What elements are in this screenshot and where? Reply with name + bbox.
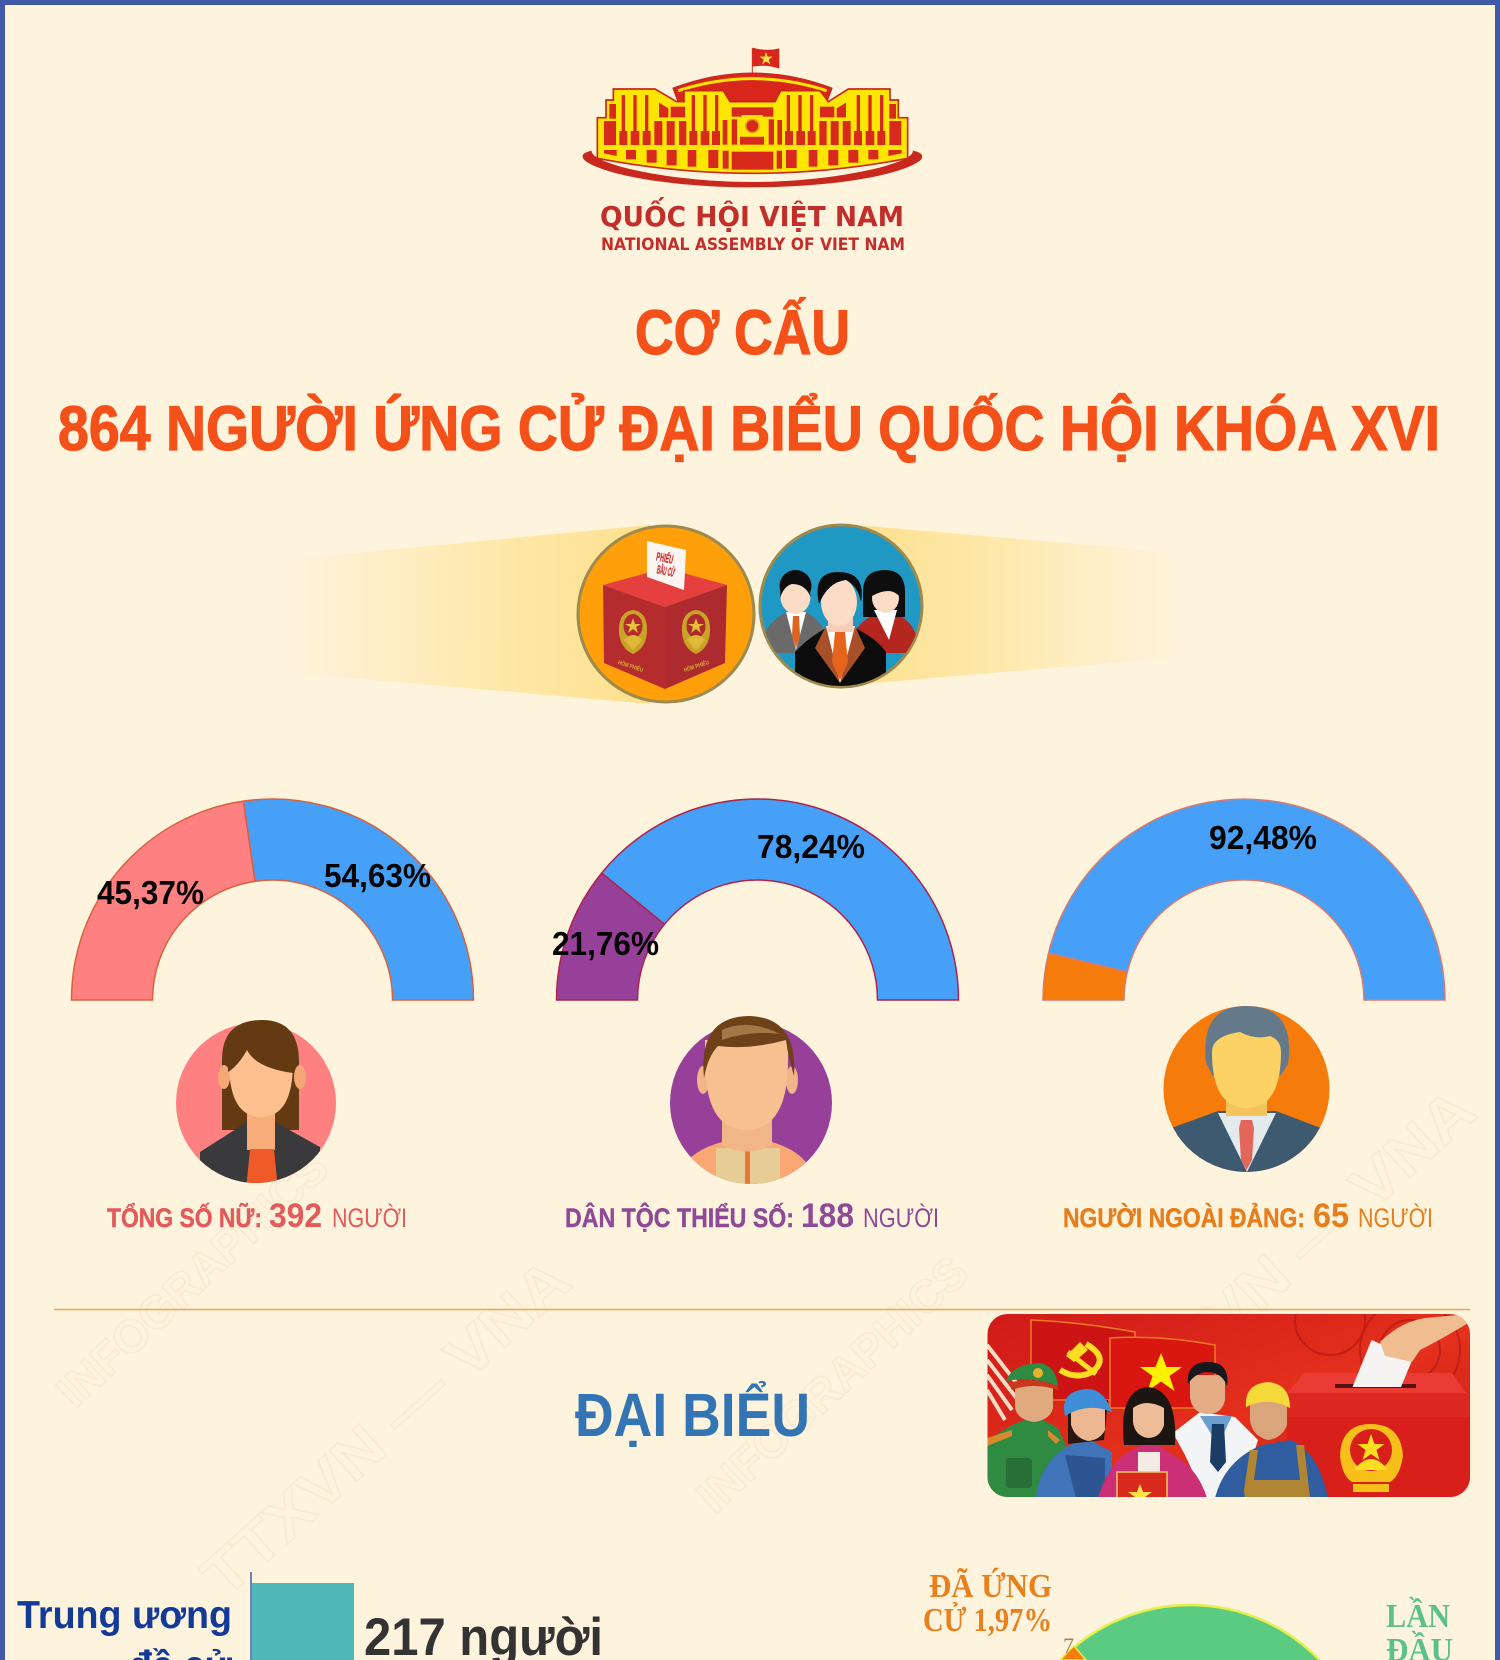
caption: ethnic minorities (565, 1197, 939, 1235)
party flag (1031, 1320, 1135, 1400)
national flag (1110, 1337, 1215, 1408)
icon: ethnic minority man avatar (670, 1016, 832, 1190)
worker woman in blue helmet (1036, 1389, 1112, 1498)
watermarks (46, 1075, 1488, 1610)
caption: non-party (1063, 1197, 1433, 1235)
caption: non-party: NGƯỜI (1358, 1202, 1433, 1233)
ballot paper: BẦU CỬ (656, 561, 676, 580)
icon: ballot box (578, 526, 754, 702)
pie label: previously ran (923, 1567, 1052, 1639)
caption: ethnic minorities: NGƯỜI (863, 1202, 939, 1233)
emblem left: HÒM PHIẾU (617, 658, 644, 674)
caption: non-party: NGƯỜI NGOÀI ĐẢNG: (1063, 1201, 1305, 1233)
dome (673, 73, 832, 102)
chart: ethnic minority semi-donut (556, 799, 958, 1000)
bar (252, 1583, 354, 1660)
ballot paper and hand (1352, 1314, 1470, 1387)
chart value labels: 21,76% (552, 925, 659, 962)
banner illustration (988, 1314, 1470, 1497)
emblem right (682, 610, 710, 674)
chart: non-party semi-donut (1043, 799, 1445, 1000)
ballot paper (647, 541, 686, 590)
building body (597, 89, 908, 173)
chart value labels: 78,24% (757, 828, 865, 865)
bar label (17, 1594, 233, 1660)
bar label: Trung ương (17, 1594, 232, 1637)
soldier (987, 1363, 1068, 1498)
watermarks: INFOGRAPHICS (686, 1246, 978, 1522)
chart: women semi-donut (72, 799, 474, 1000)
icon: non-party man avatar (1164, 1006, 1330, 1180)
icon: woman avatar (176, 1020, 336, 1190)
watermarks: TTXVN — VNA (189, 1245, 583, 1610)
woman in pink (1098, 1387, 1207, 1506)
caption: women: 392 (269, 1197, 322, 1235)
red folder (1116, 1471, 1168, 1497)
caption: non-party: 65 (1313, 1197, 1349, 1235)
pie chart: candidacy history (1060, 1605, 1320, 1660)
chart value labels: 45,37% (97, 874, 204, 911)
right woman (853, 570, 918, 653)
center man (795, 572, 886, 690)
bar chart: nominated by central (17, 1572, 603, 1660)
pie chart: candidacy history: 7 (1063, 1633, 1074, 1658)
title (58, 297, 1440, 464)
icon: flag (752, 48, 779, 74)
chart value labels: 92,48% (1209, 819, 1317, 856)
ballot box (1287, 1373, 1470, 1498)
caption: ethnic minorities: 188 (801, 1197, 854, 1235)
left man (762, 570, 827, 653)
emblem left (617, 610, 647, 674)
light beam left (282, 525, 650, 704)
icon: candidates group (760, 525, 922, 690)
emblem right: HÒM PHIẾU (683, 658, 710, 674)
pie label: first time: LẦN (1386, 1596, 1450, 1635)
chart value labels (97, 819, 1317, 962)
caption: women: NGƯỜI (332, 1202, 407, 1233)
caption: women: TỔNG SỐ NỮ: (107, 1201, 262, 1233)
pie label: previously ran: CỬ 1,97% (923, 1601, 1052, 1639)
chart value labels: 54,63% (324, 857, 431, 894)
pie label: previously ran: ĐÃ ỨNG (929, 1567, 1052, 1605)
title: CƠ CẤU (635, 297, 850, 368)
logo text: Vietnamese: QUỐC HỘI VIỆT NAM (600, 195, 904, 233)
watermarks: INFOGRAPHICS (46, 1141, 338, 1417)
heading: delegates: ĐẠI BIỂU (575, 1381, 810, 1449)
pie label: first time (1386, 1596, 1453, 1660)
light beam right (856, 525, 1182, 684)
logo: National Assembly building (583, 48, 922, 187)
emblem (1340, 1424, 1403, 1492)
caption: ethnic minorities: DÂN TỘC THIỂU SỐ: (565, 1201, 794, 1233)
worker in yellow helmet (1215, 1382, 1328, 1498)
logo text: English: NATIONAL ASSEMBLY OF VIET NAM (601, 235, 905, 255)
doctor (1173, 1362, 1258, 1498)
ground ring (583, 151, 922, 187)
caption: women (107, 1197, 407, 1235)
watermarks: TTXVN — VNA (1094, 1075, 1488, 1440)
ballot paper: PHIẾU (655, 548, 675, 567)
